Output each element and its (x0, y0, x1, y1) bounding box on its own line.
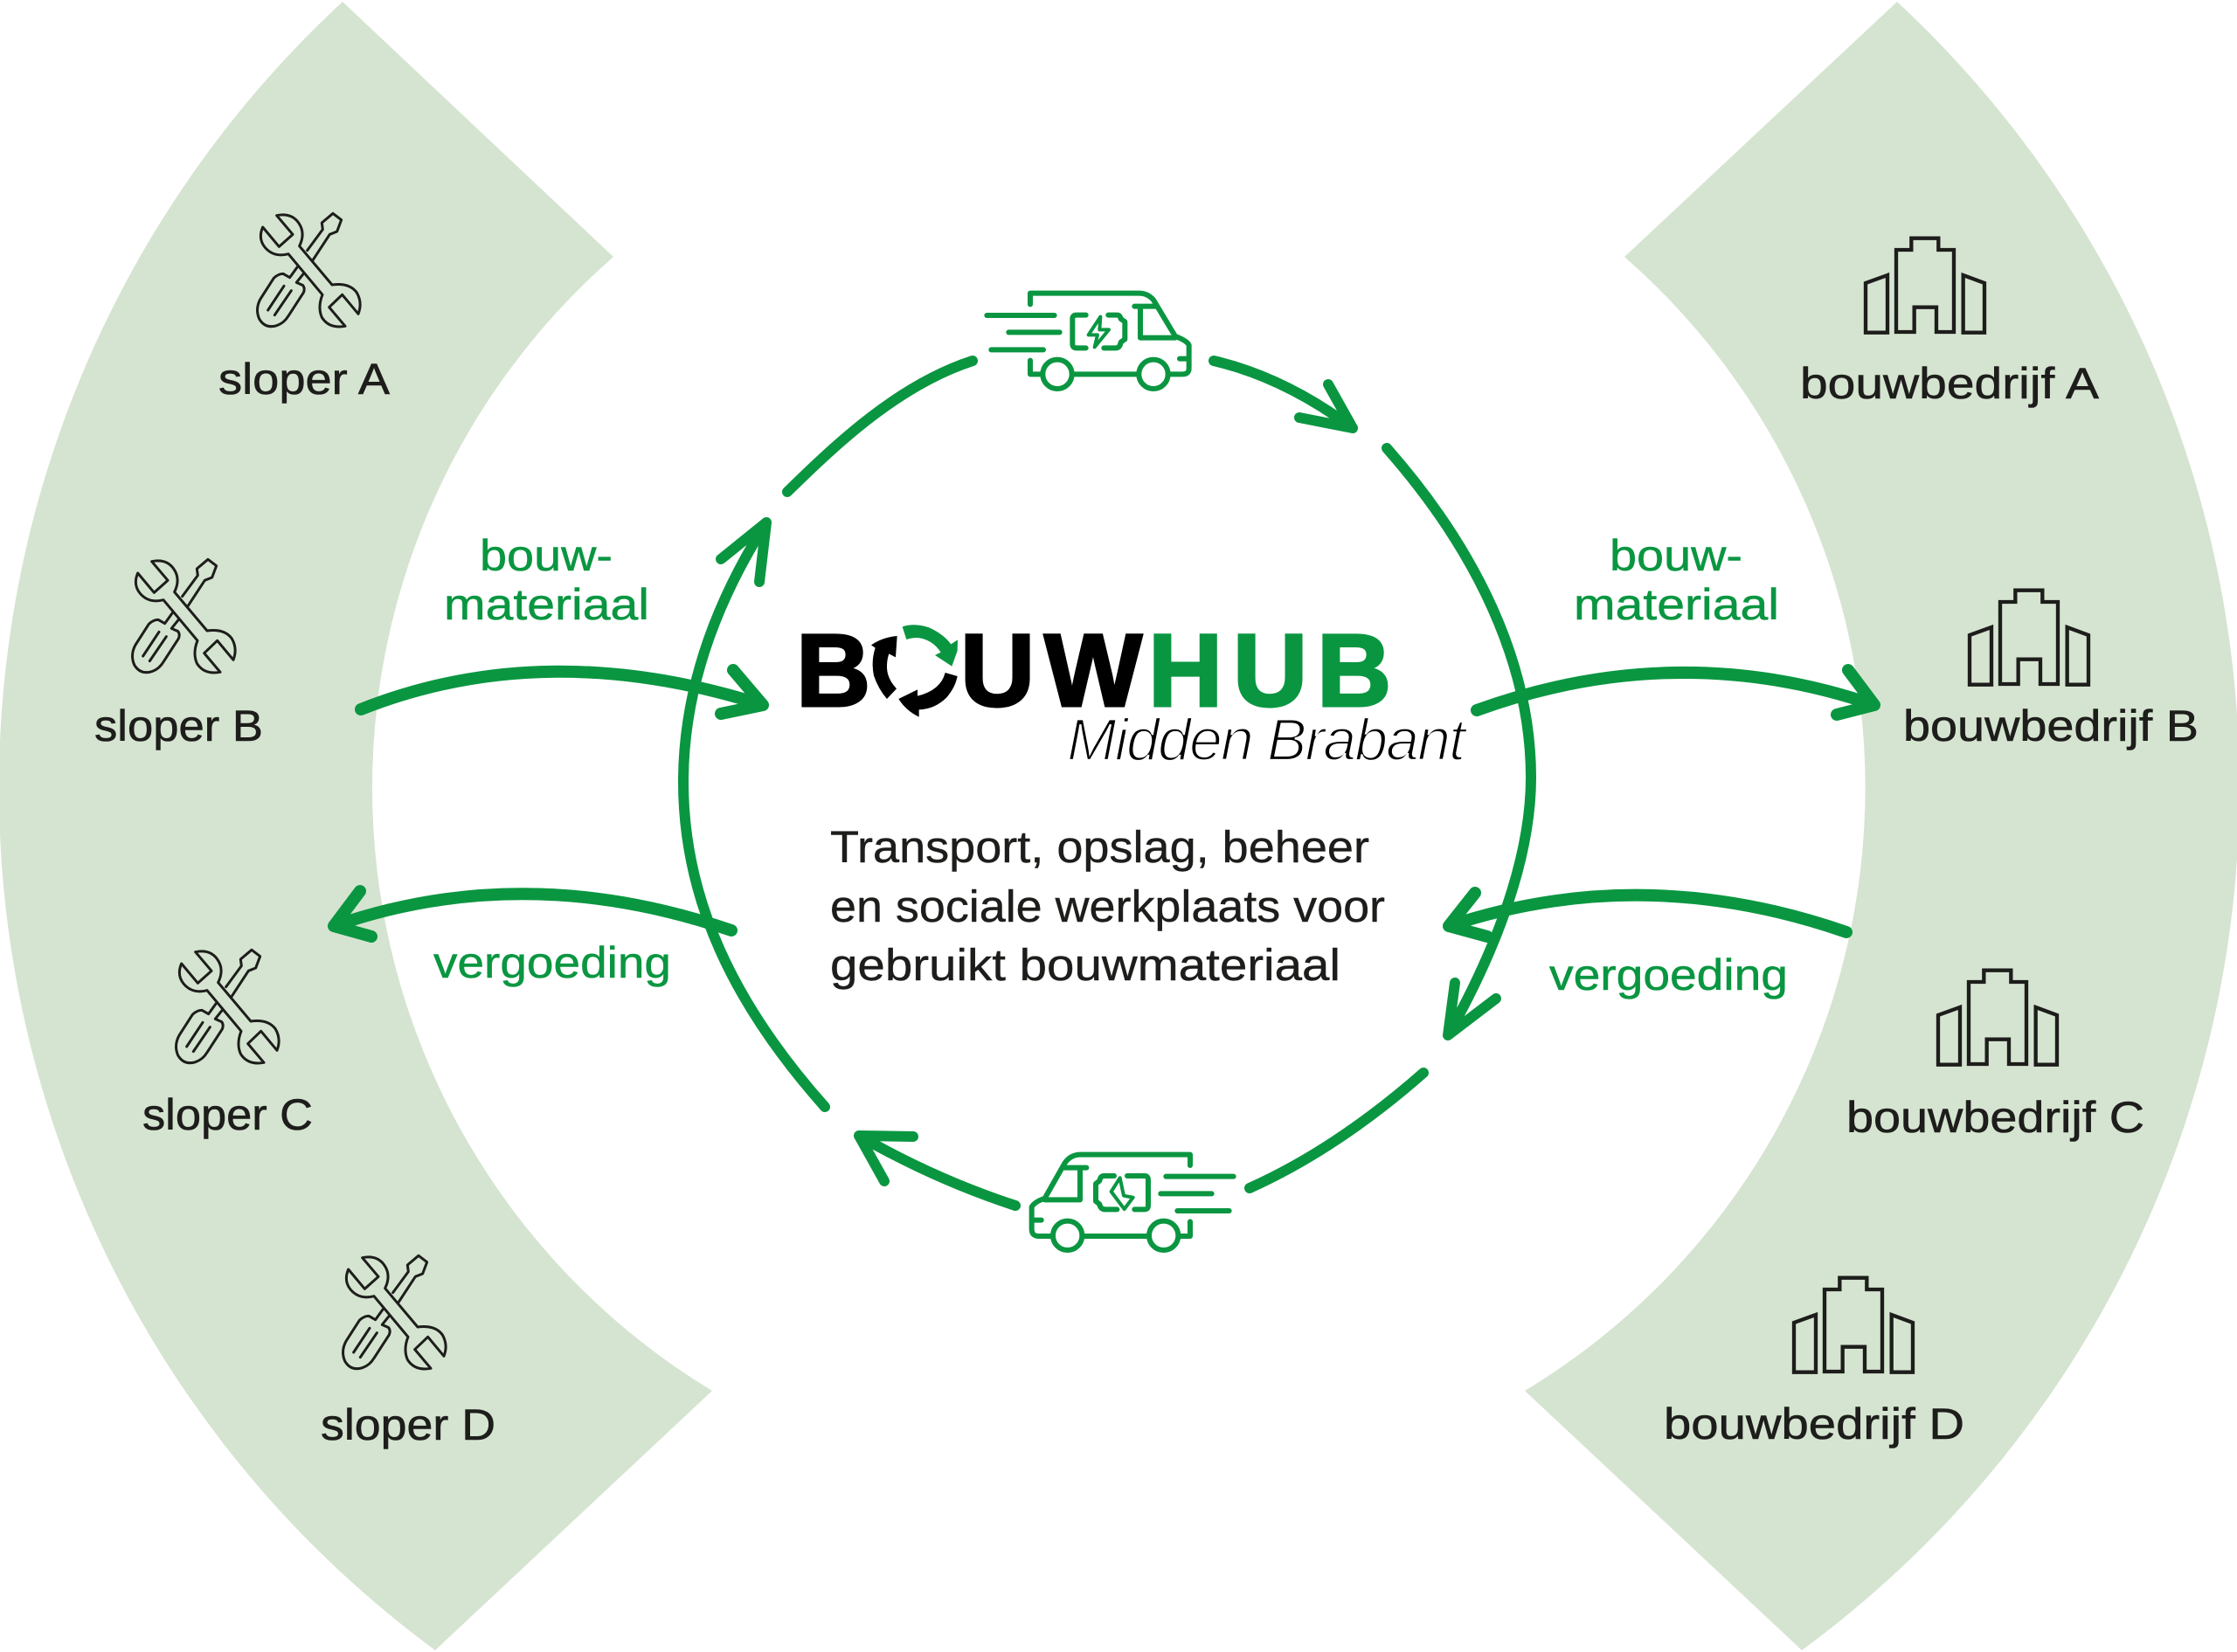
panel: slopers band (0, 2, 712, 1650)
label: bouw-materiaal right: bouw- (1610, 531, 1742, 580)
logo: Bouwhub (796, 613, 1468, 773)
arrow: bouwmateriaal from slopers to hub (361, 670, 763, 714)
icon: tools sloper A (258, 213, 360, 327)
arrow: cycle bottom-left segment (859, 1136, 1015, 1206)
arrow: cycle top-left segment (787, 361, 973, 492)
label: bouwbedrijf B: bouwbedrijf B (1903, 702, 2199, 750)
arrow: cycle top-right segment (1214, 361, 1353, 428)
icon: bottom electric van (1032, 1155, 1234, 1250)
label: sloper C: sloper C (142, 1090, 313, 1139)
logo word: BOUW: U (960, 613, 1035, 729)
icon: building D (1794, 1278, 1913, 1372)
icon: top electric van (987, 294, 1189, 389)
text block: hub description: Transport, opslag, beheer (830, 822, 1369, 872)
arrow: vergoeding from bouwbedrijven to hub (1449, 893, 1846, 937)
icon: tools sloper B (133, 559, 235, 673)
icon: tools sloper C (177, 950, 279, 1063)
icon: building A (1866, 238, 1984, 333)
arrow: cycle bottom-right segment (1250, 1073, 1423, 1188)
label: bouw-materiaal left: bouw- (480, 531, 613, 580)
label: bouwbedrijf D: bouwbedrijf D (1664, 1400, 1964, 1448)
label: bouw-materiaal left (444, 531, 649, 629)
label: sloper A: sloper A (218, 355, 391, 404)
central cycle arrows (683, 361, 1531, 1206)
logo word: HUB: B (1317, 613, 1391, 729)
text block: hub description (830, 822, 1385, 990)
panel: bouwbedrijven band (1525, 2, 2237, 1650)
logo word: BOUW (796, 613, 1143, 729)
arrow: cycle right segment (1387, 448, 1531, 1035)
logo word: HUB: U (1233, 613, 1307, 729)
label: bouw-materiaal right: materiaal (1574, 580, 1779, 629)
label: vergoeding right: vergoeding (1549, 950, 1788, 999)
text block: hub description: en sociale werkplaats voor (830, 881, 1385, 931)
icon: building C (1938, 971, 2057, 1065)
label: vergoeding left: vergoeding (433, 938, 671, 987)
logo word: HUB: H (1148, 613, 1222, 729)
text block: hub description: gebruikt bouwmateriaal (830, 940, 1340, 990)
label: bouw-materiaal right (1574, 531, 1779, 629)
logo subtitle: Midden Brabant: Midden Brabant (1067, 707, 1468, 773)
logo icon: recycle ring (871, 625, 958, 717)
label: sloper B: sloper B (94, 702, 263, 750)
label: sloper D: sloper D (321, 1400, 495, 1449)
icon: tools sloper D (343, 1255, 446, 1369)
arrow: vergoeding from hub to slopers (334, 891, 731, 937)
label: bouw-materiaal left: materiaal (444, 580, 649, 629)
label: bouwbedrijf A: bouwbedrijf A (1800, 359, 2100, 408)
logo word: BOUW: B (796, 613, 870, 729)
logo word: BOUW: W (1044, 613, 1143, 729)
arrow: cycle left segment (683, 522, 825, 1107)
arrow: bouwmateriaal from hub to bouwbedrijven (1477, 670, 1874, 715)
logo word: HUB (1148, 613, 1391, 729)
label: bouwbedrijf C: bouwbedrijf C (1846, 1093, 2144, 1142)
icon: building B (1970, 591, 2088, 685)
